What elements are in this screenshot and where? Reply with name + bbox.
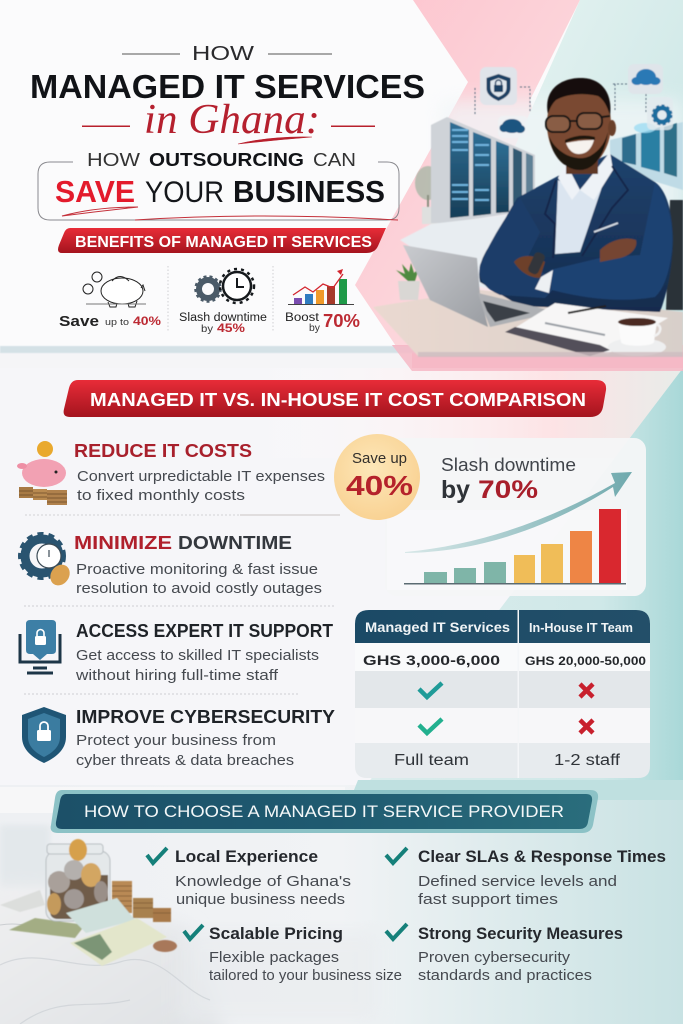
person xyxy=(479,78,673,312)
icon: monitor with lock xyxy=(20,620,60,673)
table header: In-House IT Team xyxy=(529,620,633,635)
coin xyxy=(153,940,177,952)
provider item: clear SLAs: fast support times xyxy=(418,891,558,908)
table row: second check and cross xyxy=(419,719,593,733)
stat: save up to 40%: 40% xyxy=(133,314,161,328)
right sleeve xyxy=(550,182,672,300)
benefit: improve cybersecurity: IMPROVE CYBERSECURITY xyxy=(76,706,336,727)
benefit: reduce IT costs: Convert urpredictable IT expenses xyxy=(77,468,325,485)
stat: slash downtime by 45%: by xyxy=(201,323,214,335)
table row: team size: 1-2 staff xyxy=(554,752,621,769)
illustration: coin jar and banknotes xyxy=(0,839,177,966)
callout: slash downtime by 70%: 70% xyxy=(478,476,538,504)
coin stacks xyxy=(112,881,171,922)
icon: gear tile xyxy=(647,97,673,130)
panel: bottom section background xyxy=(0,780,683,1024)
provider item: local experience: Local Experience xyxy=(175,847,318,866)
subtitle: how outsourcing can xyxy=(87,149,356,170)
provider item: clear SLAs: Clear SLAs & Response Times xyxy=(418,847,666,866)
icon: rising bar chart xyxy=(288,269,354,305)
stat: slash downtime by 45% xyxy=(179,312,267,335)
hair xyxy=(547,78,611,116)
bar chart xyxy=(404,509,626,584)
floor xyxy=(400,212,535,290)
watch xyxy=(527,251,546,276)
smile xyxy=(566,140,594,154)
provider item: strong security: standards and practices xyxy=(418,967,592,984)
shirt cuff xyxy=(535,270,553,293)
banner: cost comparison: MANAGED IT VS. IN-HOUSE IT COST COMPARISON xyxy=(90,389,586,410)
beard xyxy=(549,132,608,170)
benefit: improve cybersecurity: Protect your business from xyxy=(76,732,276,749)
icon: cloud tile xyxy=(628,64,663,94)
benefit: minimize downtime: MINIMIZE xyxy=(74,532,172,553)
arrow: growth trend xyxy=(405,472,632,553)
provider item: local experience: Knowledge of Ghana's xyxy=(175,873,351,890)
banner: benefits of managed it services xyxy=(58,228,386,253)
callout: save up 40%: Save up xyxy=(352,450,407,467)
banner: how to choose xyxy=(51,790,598,833)
comparison table xyxy=(355,610,650,778)
stat: save up to 40%: up to xyxy=(105,317,129,327)
stat: save up to 40%: Save xyxy=(59,313,99,330)
benefits row xyxy=(59,269,360,335)
stat: boost by 70%: Boost xyxy=(285,312,320,324)
stat: boost by 70% xyxy=(285,310,360,334)
bottom desk edge xyxy=(418,352,683,357)
glasses xyxy=(546,113,610,132)
subtitle: save your business xyxy=(55,174,398,220)
benefit: minimize downtime: resolution to avoid costly outages xyxy=(76,580,322,597)
subtitle: save your business: YOUR xyxy=(145,176,224,209)
subtitle: how outsourcing can: CAN xyxy=(313,149,356,170)
benefit: minimize downtime xyxy=(20,532,322,597)
benefit: reduce IT costs xyxy=(17,440,325,505)
banner: how to choose: HOW TO CHOOSE A MANAGED IT SERVICE PROVIDER xyxy=(84,802,564,821)
glass jar xyxy=(46,839,110,921)
table header: Managed IT Services xyxy=(365,620,510,635)
title: in Ghana xyxy=(82,97,375,144)
table row: first check and cross xyxy=(419,683,593,697)
subtitle: how outsourcing can: HOW xyxy=(87,149,141,170)
benefit: reduce IT costs: to fixed monthly costs xyxy=(77,487,245,504)
stat: boost by 70%: by xyxy=(309,322,321,334)
icon: gears and clock xyxy=(196,269,254,303)
banner: cost comparison xyxy=(64,380,606,417)
benefit: improve cybersecurity: cyber threats & data breaches xyxy=(76,752,294,769)
callout: slash downtime by 70%: by xyxy=(441,476,470,504)
desk xyxy=(373,290,683,356)
title: managed it services: MANAGED IT SERVICES xyxy=(30,69,425,106)
provider item: strong security xyxy=(386,924,623,984)
benefit: minimize downtime: Proactive monitoring & fast issue xyxy=(76,561,318,578)
papers xyxy=(505,303,668,356)
benefit: access expert IT support xyxy=(20,620,334,684)
icon: small cloud tile xyxy=(498,116,528,138)
stat: slash downtime by 45%: Slash downtime xyxy=(179,312,267,324)
save your business box xyxy=(38,162,399,220)
stat: boost by 70%: 70% xyxy=(323,310,360,331)
benefit: reduce IT costs: REDUCE IT COSTS xyxy=(74,440,252,461)
subtitle: save your business: SAVE xyxy=(55,174,135,209)
coffee cup xyxy=(608,318,666,356)
provider item: strong security: Strong Security Measures xyxy=(418,924,623,943)
panel: hero background xyxy=(0,0,683,382)
table row: team size: Full team xyxy=(394,752,469,769)
server racks left xyxy=(431,117,535,223)
provider item: local experience xyxy=(147,847,351,908)
lapels xyxy=(545,166,628,258)
title: in Ghana: in Ghana: xyxy=(144,97,320,143)
provider item: scalable pricing: Flexible packages xyxy=(209,949,339,966)
callout: slash downtime by 70%: Slash downtime xyxy=(441,455,576,475)
banknotes xyxy=(66,898,167,966)
benefit: access expert IT support: ACCESS EXPERT IT SUPPORT xyxy=(76,620,334,641)
chair xyxy=(666,200,683,310)
table row: team size xyxy=(394,752,621,769)
title: how: HOW xyxy=(192,42,255,65)
icon: gear with clock xyxy=(20,534,74,589)
icon: small desk plant xyxy=(396,263,420,300)
benefit: access expert IT support: Get access to skilled IT specialists xyxy=(76,647,319,664)
callout: slash downtime by 70% xyxy=(441,455,576,504)
collar xyxy=(558,152,613,200)
stat: save up to 40% xyxy=(59,313,161,330)
callout: save up 40% xyxy=(334,434,420,520)
provider item: local experience: unique business needs xyxy=(176,891,345,908)
stat: slash downtime by 45%: 45% xyxy=(217,321,245,335)
icon: shield with lock xyxy=(22,707,66,763)
laptop xyxy=(403,245,557,327)
callout: save up 40%: 40% xyxy=(346,470,413,501)
provider item: strong security: Proven cybersecurity xyxy=(418,949,571,966)
panel: lower section background xyxy=(0,345,683,800)
panel: savings chart card xyxy=(334,434,646,596)
jacket xyxy=(479,154,673,312)
icon: shield tile xyxy=(480,67,517,105)
icon: pink piggy bank xyxy=(17,441,67,505)
subtitle: save your business: BUSINESS xyxy=(233,174,385,209)
provider item: scalable pricing: tailored to your business size xyxy=(209,967,402,984)
table row: price: GHS 3,000-6,000 xyxy=(363,652,500,668)
illustration: hero office scene xyxy=(373,64,683,357)
provider item: scalable pricing: Scalable Pricing xyxy=(209,924,343,943)
provider item: scalable pricing xyxy=(184,924,402,984)
shirt xyxy=(555,155,610,254)
benefit: improve cybersecurity xyxy=(22,706,336,769)
banknote left xyxy=(9,918,85,938)
hands xyxy=(600,238,636,262)
subtitle: how outsourcing can: OUTSOURCING xyxy=(149,149,304,170)
icon: piggy bank outline xyxy=(83,272,146,307)
table row: price xyxy=(363,652,646,668)
head xyxy=(547,79,611,169)
provider item: clear SLAs xyxy=(386,847,666,908)
table row: price: GHS 20,000-50,000 xyxy=(525,654,646,668)
icon: potted tree xyxy=(415,166,441,224)
banner: benefits of managed it services: BENEFITS OF MANAGED IT SERVICES xyxy=(75,234,372,251)
neck xyxy=(566,148,598,174)
server racks right xyxy=(610,122,683,190)
provider item: clear SLAs: Defined service levels and xyxy=(418,873,617,890)
benefit: minimize downtime: DOWNTIME xyxy=(178,532,292,553)
benefit: access expert IT support: without hiring full-time staff xyxy=(75,667,279,684)
title block xyxy=(30,42,425,220)
left sleeve xyxy=(479,198,560,298)
table header xyxy=(365,620,633,635)
